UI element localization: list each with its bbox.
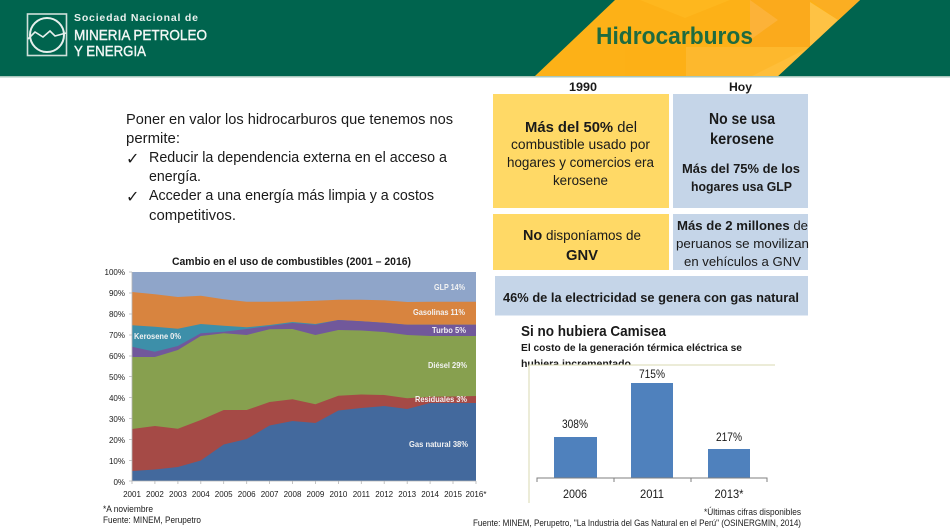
series labels: Turbo 5% [432,325,466,335]
y axis labels: 100% [105,268,125,277]
panel: 1990 GNV: GNV [566,247,598,264]
column heading: Hoy: Hoy [729,80,752,94]
logo: Sociedad Nacional de [74,12,198,24]
stacked areas [132,272,476,481]
intro text block: competitivos. [149,207,236,224]
panel: 1990 GNV [493,214,669,270]
chart footnote [103,504,201,526]
x axis labels: 2010 [330,490,348,499]
x axis labels: 2014 [421,490,440,499]
panel: hoy kerosene: kerosene [710,131,774,148]
logo [28,12,207,60]
y axis labels [105,268,125,487]
x axis labels [123,490,486,499]
intro text block [126,111,453,224]
area chart: cambio en el uso de combustibles [105,256,486,499]
logo: Y ENERGIA [74,43,146,60]
bar category labels: 2006 [563,487,587,501]
panel: 1990 GNV: No disponíamos de [523,227,641,244]
y axis labels: 10% [109,457,125,466]
x axis labels: 2013 [398,490,417,499]
heading: si no hubiera Camisea: El costo de la generación térmica eléctrica se [521,342,742,354]
x axis labels: 2008 [284,490,302,499]
source notes: *Últimas cifras disponibles [704,507,801,518]
panel: electricidad: 46% de la electricidad se genera con gas natural [503,290,799,305]
series labels: Gasolinas 11% [413,307,465,317]
y axis labels: 0% [113,478,125,487]
bar value labels: 217% [716,430,742,444]
bar category labels [563,487,744,501]
panel: hoy GNV: Más de 2 millones de [677,218,808,233]
y axis labels: 60% [109,352,125,361]
x axis labels: 2004 [192,490,210,499]
x axis labels: 2003 [169,490,187,499]
panel: 1990 kerosene [493,94,669,208]
panel: electricidad [495,276,808,316]
heading: si no hubiera Camisea: Si no hubiera Camisea [521,323,667,340]
y axis labels: 30% [109,415,125,424]
bar value labels: 308% [562,417,588,431]
panel: 1990 kerosene: kerosene [553,173,608,188]
heading: si no hubiera Camisea [521,323,742,370]
y axis labels: 80% [109,310,125,319]
bar category labels: 2013* [714,487,744,501]
panel: 1990 kerosene: combustible usado por [511,137,651,152]
series labels [134,282,468,449]
panel: 1990 kerosene: Más del 50% del [525,119,637,136]
bar value labels [562,367,742,444]
x axis labels: 2007 [261,490,279,499]
panel: hoy kerosene: Más del 75% de los [682,161,800,176]
source notes [473,507,801,529]
y axis labels: 90% [109,289,125,298]
series labels: Residuales 3% [415,394,467,404]
header yellow parallelogram [530,0,865,77]
chart footnote: *A noviembre [103,504,153,515]
panel: hoy GNV: en vehículos a GNV [684,254,801,269]
column heading: 1990: 1990 [569,80,597,94]
bar category labels: 2011 [640,487,664,501]
x axis labels: 2005 [215,490,233,499]
series labels: GLP 14% [434,282,465,292]
y axis labels: 20% [109,436,125,445]
panel: 1990 kerosene: hogares y comercios era [507,155,654,170]
header banner [0,0,950,78]
series labels: Kerosene 0% [134,331,181,341]
x axis labels: 2015 [444,490,462,499]
intro text block: ✓ [126,149,139,168]
x axis labels: 2009 [307,490,325,499]
panel: hoy kerosene [673,94,808,208]
series labels: Diésel 29% [428,360,467,370]
intro text block: permite: [126,130,180,147]
x axis labels: 2016* [466,490,486,499]
bars [554,383,750,478]
x axis labels: 2002 [146,490,164,499]
panel: hoy GNV: peruanos se movilizan [676,236,809,251]
source notes: Fuente: MINEM, Perupetro, "La Industria del Gas Natural en el Perú" (OSINERGMIN, 2014) [473,518,801,529]
intro text block: energía. [149,168,201,185]
x axis labels: 2011 [353,490,370,499]
intro text block: Reducir la dependencia externa en el acceso a [149,149,448,166]
y axis labels: 40% [109,394,125,403]
intro text block: Acceder a una energía más limpia y a costos [149,187,434,204]
title: Hidrocarburos [596,23,753,50]
y axis labels: 50% [109,373,125,382]
bar value labels: 715% [639,367,665,381]
bar chart: costo de generación [529,365,779,505]
x axis labels: 2006 [238,490,256,499]
panel: hoy kerosene: No se usa [709,111,775,128]
intro text block: Poner en valor los hidrocarburos que tenemos nos [126,111,453,128]
heading: si no hubiera Camisea: hubiera incrementado [521,358,631,370]
panel: hoy GNV [673,214,809,270]
y axis labels: 70% [109,331,125,340]
x axis labels: 2001 [123,490,141,499]
intro text block: ✓ [126,187,139,206]
chart footnote: Fuente: MINEM, Perupetro [103,515,201,526]
logo: MINERIA PETROLEO [74,27,207,44]
chart title: Cambio en el uso de combustibles (2001 – 2016) [172,256,411,268]
series labels: Gas natural 38% [409,439,468,449]
panel: hoy kerosene: hogares usa GLP [691,179,792,194]
x axis labels: 2012 [375,490,394,499]
